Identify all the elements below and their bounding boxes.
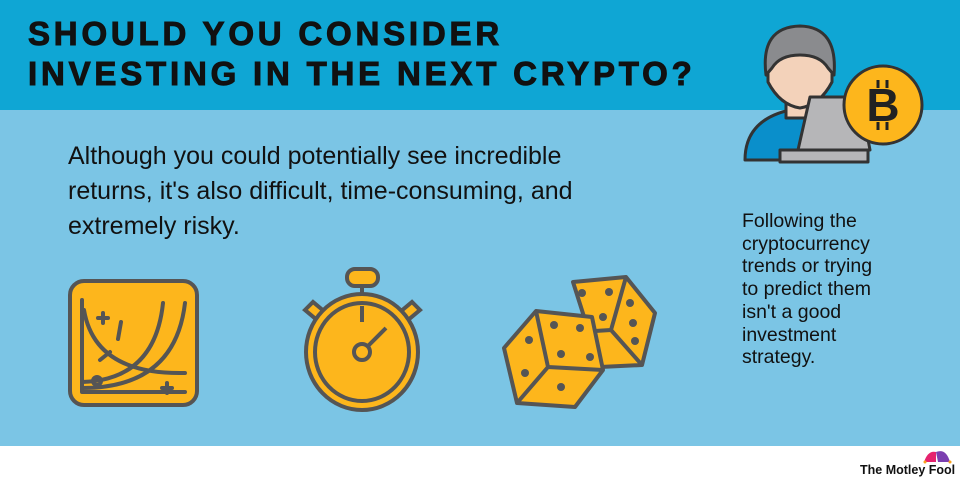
- title: SHOULD YOU CONSIDER: [28, 15, 503, 52]
- icon: chart: [68, 279, 199, 407]
- title: [28, 15, 696, 92]
- side text: Following the cryptocurrency trends or trying to predict them isn't a good investment strategy.: [742, 210, 872, 368]
- header band: [0, 0, 960, 110]
- icon: jester hat: [924, 451, 952, 464]
- icon: stopwatch: [302, 267, 423, 412]
- logo text: The Motley Fool: [860, 463, 955, 477]
- logo: [860, 451, 955, 477]
- intro text: Although you could potentially see incredible returns, it's also difficult, time-consuming, and extremely risky.: [68, 142, 573, 240]
- icon: person with bitcoin: B: [866, 79, 900, 131]
- icon: person with bitcoin: [744, 24, 924, 164]
- main panel: [0, 110, 960, 446]
- title: INVESTING IN THE NEXT CRYPTO?: [28, 55, 696, 92]
